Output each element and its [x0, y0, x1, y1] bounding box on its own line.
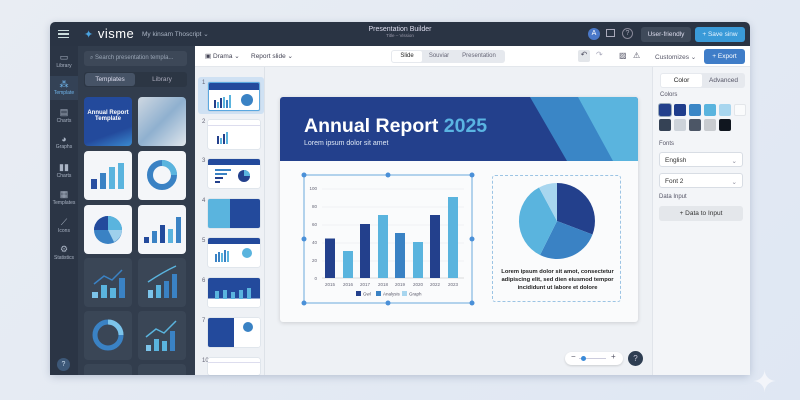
right panel	[652, 67, 750, 375]
title	[368, 26, 432, 38]
tabs	[660, 73, 745, 88]
slide header	[280, 97, 638, 161]
icon rail: Templates	[53, 200, 75, 206]
search	[84, 51, 187, 66]
bar chart: 2023	[448, 282, 459, 287]
icon rail	[50, 46, 78, 375]
button: save: + Save sinw	[702, 31, 738, 38]
text: Font 2	[665, 178, 683, 185]
subtitle: Lorem ipsum dolor sit amet	[304, 140, 388, 147]
help button: ?	[633, 354, 638, 363]
search: ⌕ Search presentation templa...	[90, 55, 173, 61]
bar chart: 2015	[325, 282, 336, 287]
tabs: Advanced	[709, 77, 738, 84]
view tabs: Presentation	[462, 53, 496, 59]
text: English	[665, 157, 686, 164]
tabs	[84, 72, 187, 87]
bar chart: 2022	[430, 282, 441, 287]
icon rail: Icons	[58, 228, 70, 234]
top bar	[50, 22, 750, 46]
icon rail: ⁂	[60, 79, 68, 89]
template cards	[84, 97, 132, 146]
pie chart	[518, 183, 595, 259]
text: 5	[202, 238, 205, 244]
toolbar: ↷	[596, 50, 603, 59]
pie caption: Lorem ipsum dolor sit amot, consectetur adipiscing elit, sed dien eiusmod tempor incididunt ut labore et dolore	[501, 269, 614, 291]
icon rail: ◕	[61, 134, 67, 144]
icon rail: Graphs	[56, 144, 72, 150]
toolbar: ▨	[619, 51, 627, 60]
toolbar: ↶	[581, 50, 587, 59]
button: save	[695, 27, 745, 42]
zoom control: −	[571, 352, 576, 361]
toolbar: ▣ Drama ⌄	[205, 53, 240, 60]
slide canvas	[280, 97, 638, 322]
export button	[704, 49, 745, 64]
bar chart: Analysis	[383, 292, 401, 296]
button: user-friendly: User-friendly	[648, 31, 684, 38]
text: 10	[202, 358, 209, 364]
bar chart: 20	[312, 258, 317, 263]
templates panel	[78, 46, 195, 375]
toolbar	[195, 46, 750, 67]
tabs: Templates	[95, 76, 125, 83]
icon rail: Charts	[57, 173, 71, 179]
avatar and icons: A	[592, 30, 596, 37]
icon rail: ?	[62, 361, 65, 368]
pie panel	[492, 175, 621, 302]
icon: menu	[58, 30, 69, 38]
thumbnails	[202, 80, 260, 376]
view tabs: Souviar	[429, 53, 449, 59]
toolbar: ⚠	[633, 51, 640, 60]
help button	[628, 351, 643, 366]
zoom control	[565, 352, 623, 365]
bar chart: Gwl	[363, 292, 371, 296]
icon rail: Library	[56, 63, 72, 69]
icon rail: ⚙	[60, 244, 68, 254]
title: Presentation Builder	[368, 26, 432, 33]
toolbar: Report slide ⌄	[251, 53, 293, 60]
title: Title – Vission	[386, 33, 414, 38]
text: ⌄	[732, 158, 737, 165]
icon rail: ⟋	[61, 217, 67, 227]
project name: My kinsam Thoscript ⌄	[142, 31, 209, 38]
toolbar: Customizes ⌄	[655, 54, 696, 61]
bar chart: 80	[312, 204, 317, 209]
zoom control: +	[611, 352, 616, 361]
bar chart: 2018	[378, 282, 389, 287]
tabs: Library	[152, 76, 172, 83]
template cards: Template	[95, 116, 121, 122]
icon rail: ▦	[60, 189, 68, 199]
bar chart: 2020	[413, 282, 424, 287]
sparkle decoration: ✦	[752, 366, 777, 399]
bar chart: 2016	[343, 282, 354, 287]
bar chart: 40	[312, 240, 317, 245]
right panel: Colors	[660, 92, 677, 98]
text: 6	[202, 278, 205, 284]
bar chart: 0	[314, 276, 317, 281]
text: 4	[202, 198, 205, 204]
bar chart: 2019	[395, 282, 406, 287]
export button: + Export	[712, 53, 737, 60]
icon rail: Charts	[57, 118, 71, 124]
bar chart	[302, 172, 474, 306]
top bar: ?	[626, 30, 629, 37]
text: 2	[202, 119, 205, 125]
slide title: Annual Report 2025	[304, 115, 487, 137]
bar chart: Graph	[409, 292, 422, 296]
icon rail: Statistics	[54, 255, 74, 261]
text: ⌄	[732, 179, 737, 186]
tabs: Color	[674, 77, 689, 84]
bar chart: 100	[309, 186, 317, 191]
text: + Data to Input	[680, 210, 722, 217]
button: user-friendly	[641, 27, 691, 42]
text: 1	[202, 80, 205, 86]
color swatches	[658, 103, 746, 131]
text: 3	[202, 158, 205, 164]
template cards: Annual Report	[87, 110, 129, 116]
bar chart: 2017	[360, 282, 371, 287]
view tabs	[391, 50, 505, 63]
app window	[50, 22, 750, 375]
icon rail: ▮▮	[59, 162, 69, 172]
logo: ✦ visme	[84, 26, 134, 41]
text: 7	[202, 318, 205, 324]
selected thumb highlight	[198, 77, 264, 114]
avatar and icons	[588, 28, 600, 40]
slide thumbnails column	[195, 67, 265, 375]
fonts section: Fonts	[659, 141, 674, 147]
icon rail: Template	[54, 90, 74, 96]
data input: Data Input	[659, 194, 687, 200]
icon rail: ▭	[60, 52, 68, 62]
icon rail: ▤	[60, 107, 68, 117]
bar chart: 60	[312, 222, 317, 227]
view tabs: Slide	[400, 53, 414, 59]
